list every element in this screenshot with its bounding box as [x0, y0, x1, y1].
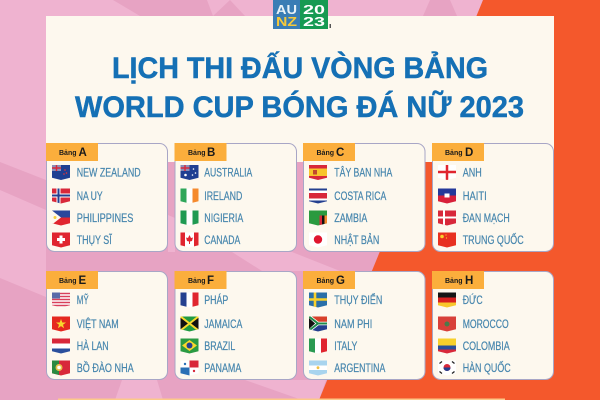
flag: Costa Rica: [309, 188, 327, 204]
flag: Spain: [309, 165, 327, 180]
panel: Bảng D: HAITI: [463, 191, 487, 203]
panel: Bảng B: AUSTRALIA: [204, 168, 253, 180]
flag: Norway: [52, 188, 70, 204]
panel: Bảng E: BỒ ĐÀO NHA: [77, 362, 134, 375]
flag: England: [438, 165, 456, 180]
flag: Haiti: [438, 188, 456, 204]
flag: Zambia: [309, 210, 327, 226]
flag: Argentina: [309, 360, 327, 376]
flag: Netherlands: [52, 338, 70, 354]
panel: Bảng F: F: [207, 275, 214, 287]
panel: Bảng C: Bảng: [316, 150, 334, 157]
logo: AU NZ 2023: 20: [303, 2, 325, 17]
panel: Bảng G: [303, 271, 425, 380]
panel: Bảng B: Bảng: [188, 150, 206, 157]
panel: Bảng A: PHILIPPINES: [77, 213, 134, 225]
panel: Bảng E: HÀ LAN: [77, 340, 109, 353]
panel: Bảng A: A: [78, 147, 87, 159]
flag: New Zealand: [52, 165, 70, 180]
flag: Jamaica: [180, 316, 198, 332]
panel: Bảng G: NAM PHI: [334, 319, 372, 331]
panel: Bảng H: MOROCCO: [463, 319, 509, 331]
panel: Bảng B: CANADA: [204, 235, 241, 247]
flag: Germany: [438, 292, 456, 308]
panel: Bảng A: NA UY: [77, 191, 103, 203]
logo: AU NZ 2023: AU: [276, 2, 297, 17]
panel: Bảng C: [303, 143, 425, 252]
panel: Bảng C: C: [336, 147, 344, 159]
panel: Bảng D: Bảng: [445, 150, 462, 157]
panel: Bảng H: [432, 271, 554, 380]
panel: Bảng C: COSTA RICA: [334, 191, 387, 203]
panel: Bảng A: [46, 143, 168, 252]
flag: Switzerland: [52, 232, 70, 248]
panel: Bảng E: [46, 271, 168, 380]
flag: Portugal: [52, 360, 70, 376]
flag: Denmark: [438, 210, 456, 226]
panel: Bảng H: H: [465, 275, 473, 287]
flag: Ireland: [180, 188, 198, 204]
flag: Philippines: [52, 210, 70, 226]
logo: AU NZ 2023: 23: [303, 14, 325, 29]
panel: Bảng E: VIỆT NAM: [77, 318, 119, 331]
panel: Bảng B: IRELAND: [204, 191, 242, 203]
panel: Bảng G: THỤY ĐIỂN: [334, 294, 382, 307]
title: [75, 51, 524, 124]
flag: Nigeria: [180, 210, 198, 226]
panel: Bảng G: Bảng: [316, 278, 334, 285]
flag: Italy: [309, 338, 327, 354]
flag: Japan: [309, 232, 327, 248]
panel: Bảng A: NEW ZEALAND: [77, 168, 141, 180]
flag: Vietnam: [52, 316, 70, 332]
panel: Bảng E: MỸ: [77, 294, 89, 307]
panel: Bảng A: Bảng: [59, 150, 76, 157]
logo: AU NZ 2023: [273, 0, 331, 29]
flag: South Korea: [438, 360, 456, 376]
panel: Bảng E: E: [78, 275, 86, 287]
panel: Bảng D: [432, 143, 554, 252]
panel: Bảng B: NIGIERIA: [204, 213, 244, 225]
panel: Bảng B: [174, 143, 296, 252]
flag: Morocco: [438, 316, 456, 332]
title: LỊCH THI ĐẤU VÒNG BẢNG: [112, 51, 488, 85]
panel: Bảng C: ZAMBIA: [334, 213, 368, 225]
panel: Bảng D: ĐAN MẠCH: [463, 213, 510, 225]
title panel: [46, 16, 554, 162]
panel: Bảng A: THỤY SĨ: [77, 234, 112, 247]
panel: Bảng D: ANH: [463, 168, 482, 180]
panel: Bảng F: PANAMA: [204, 363, 242, 375]
logo: AU NZ 2023: NZ: [276, 14, 297, 29]
panel: Bảng F: [174, 271, 296, 380]
flag: South Africa: [309, 316, 327, 332]
panel: Bảng G: G: [336, 275, 345, 287]
panel: Bảng D: D: [465, 147, 473, 159]
title: WORLD CUP BÓNG ĐÁ NỮ 2023: [75, 90, 524, 124]
panel: Bảng E: Bảng: [59, 278, 76, 285]
panel: Bảng H: COLOMBIA: [463, 341, 510, 353]
panel: Bảng H: HÀN QUỐC: [463, 361, 511, 375]
panel: Bảng F: BRAZIL: [204, 341, 236, 353]
flag: Panama: [180, 360, 198, 376]
flag: USA: [52, 292, 70, 308]
panel: Bảng F: PHÁP: [204, 294, 229, 307]
flag: Australia: [180, 165, 198, 180]
flag: France: [180, 292, 198, 308]
panel: Bảng G: ARGENTINA: [334, 363, 386, 375]
panel: Bảng H: ĐỨC: [463, 294, 483, 307]
panel: Bảng C: NHẬT BẢN: [334, 234, 379, 247]
flag: Colombia: [438, 338, 456, 354]
panel: Bảng G: ITALY: [334, 341, 358, 353]
panel: Bảng F: Bảng: [188, 278, 206, 285]
flag: Brazil: [180, 338, 198, 354]
panel: Bảng B: B: [207, 147, 215, 159]
panel: Bảng D: TRUNG QUỐC: [463, 233, 524, 247]
flag: China: [438, 232, 456, 248]
flag: Canada: [180, 232, 198, 248]
panel: Bảng H: Bảng: [445, 278, 462, 285]
flag: Sweden: [309, 292, 327, 308]
panel: Bảng C: TÂY BAN NHA: [334, 166, 393, 180]
panel: Bảng F: JAMAICA: [204, 319, 243, 331]
